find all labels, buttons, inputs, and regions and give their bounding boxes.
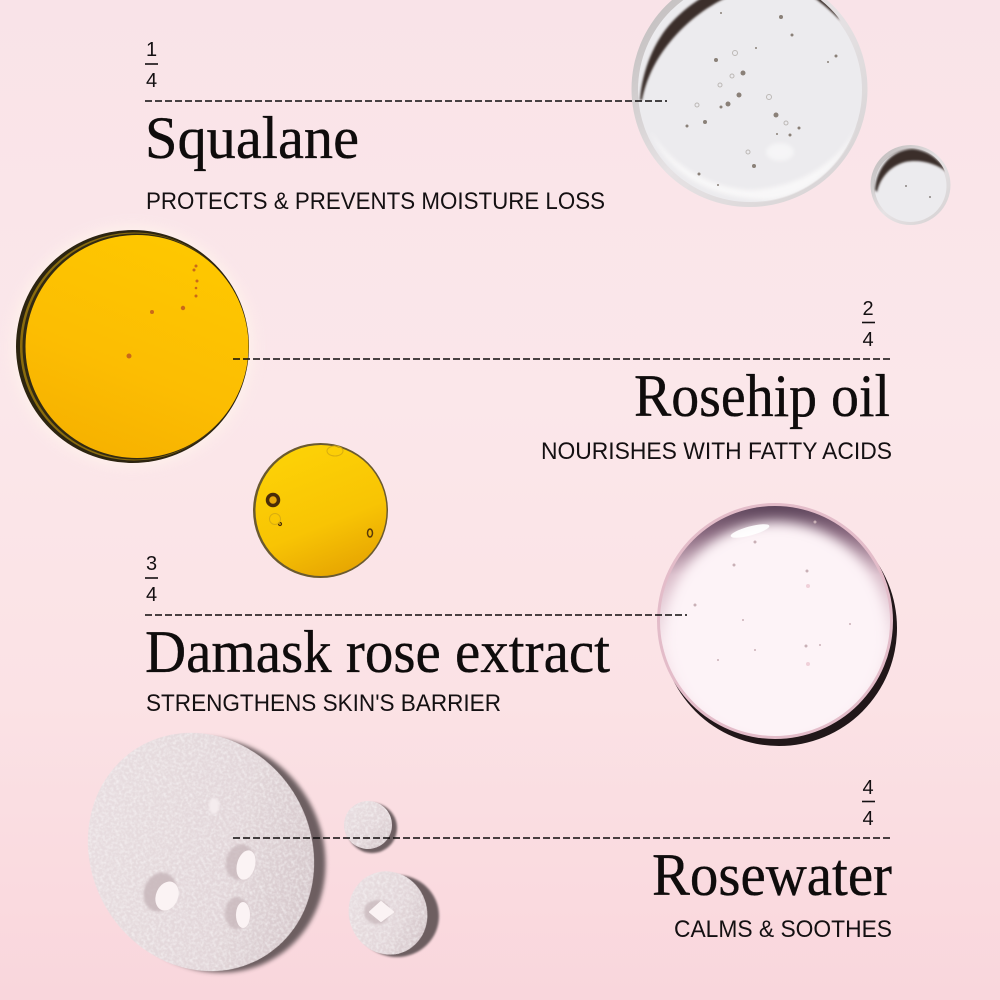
fraction 2/4: [862, 298, 875, 351]
heading: Rosewater: [652, 842, 892, 908]
description: STRENGTHENS SKIN'S BARRIER: [146, 690, 501, 717]
description: PROTECTS & PREVENTS MOISTURE LOSS: [146, 188, 605, 215]
description: NOURISHES WITH FATTY ACIDS: [541, 438, 892, 465]
divider line: [145, 614, 687, 616]
droplet: damask rose: [657, 503, 897, 746]
section: rosehip oil: [233, 298, 892, 465]
droplet: large squalane: [632, 0, 868, 207]
fraction 1/4: 4: [146, 70, 157, 92]
fraction 3/4: [145, 553, 158, 606]
fraction 2/4: 2: [862, 298, 874, 320]
heading: Squalane: [145, 105, 359, 171]
divider line: [233, 837, 890, 839]
section: rosewater: [233, 777, 892, 943]
section: squalane: [145, 39, 667, 215]
description: CALMS & SOOTHES: [674, 916, 892, 943]
droplet: large rosewater foam: [45, 691, 368, 1000]
fraction 1/4: [145, 39, 158, 92]
divider line: [145, 100, 667, 102]
droplet: large rosehip: [12, 226, 254, 468]
droplet: medium rosewater foam: [337, 860, 439, 966]
droplet: small rosewater foam: [344, 801, 397, 853]
droplet: small rosehip: [253, 443, 388, 578]
fraction 1/4: 1: [146, 39, 157, 61]
droplet: small squalane: [870, 145, 950, 225]
divider line: [233, 358, 890, 360]
section: damask rose extract: [145, 553, 687, 717]
heading: Damask rose extract: [145, 619, 610, 685]
fraction 4/4: [862, 777, 875, 830]
fraction 4/4: 4: [862, 808, 874, 830]
heading: Rosehip oil: [634, 363, 890, 429]
fraction 4/4: 4: [862, 777, 874, 799]
fraction 2/4: 4: [862, 329, 874, 351]
fraction 3/4: 4: [146, 584, 157, 606]
fraction 3/4: 3: [146, 553, 157, 575]
